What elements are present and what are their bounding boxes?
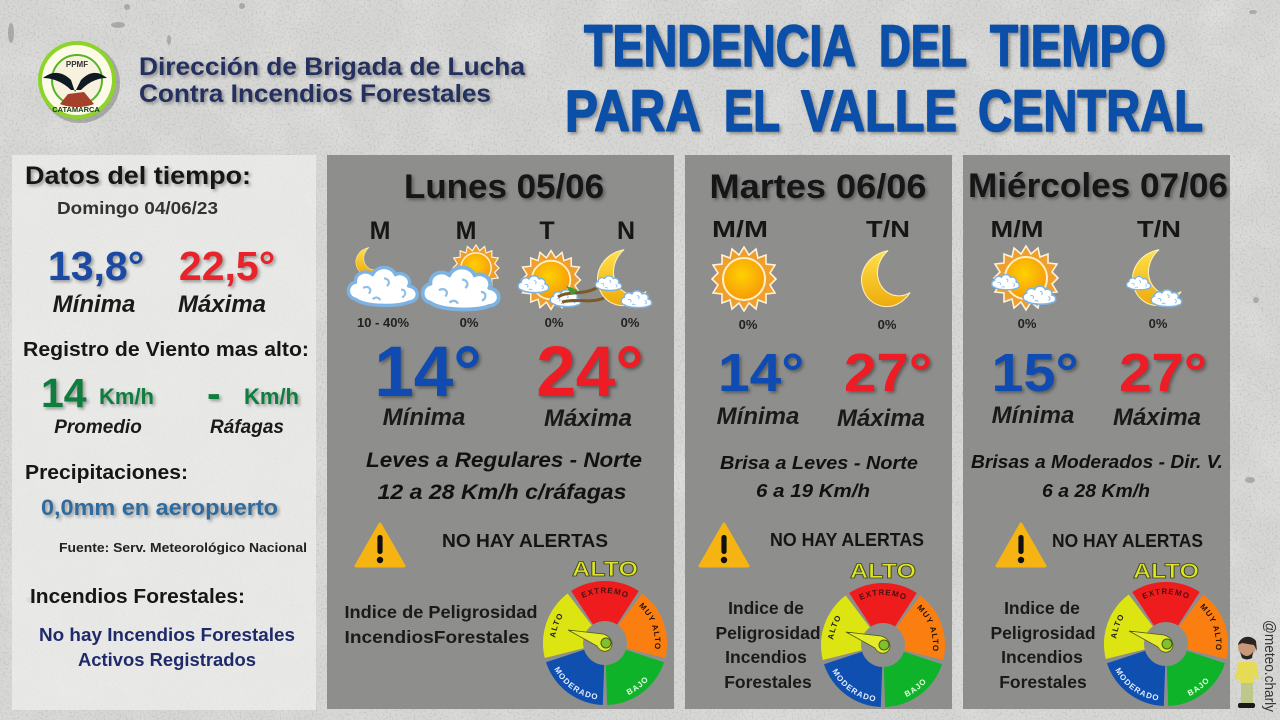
icon: sun with cloud (423, 245, 499, 309)
period labels: M/M (990, 216, 1044, 242)
alert: NO HAY ALERTAS (1052, 531, 1203, 551)
fire danger label (715, 598, 821, 692)
icon: sun with clouds (992, 246, 1058, 310)
period labels: M (456, 217, 476, 245)
fire danger label: Peligrosidad (715, 623, 821, 643)
maximum label: Máxima (178, 291, 266, 318)
maximum temperature: 27° (1119, 343, 1207, 403)
fire danger label: Incendios (725, 647, 807, 667)
main title: VALLE (801, 79, 957, 144)
rain probabilities: 10 - 40% (357, 315, 409, 330)
temperature labels: Mínima (383, 404, 465, 431)
header logo: PPMF (66, 60, 88, 69)
period labels (990, 216, 1181, 242)
heading: datos del tiempo: Datos del tiempo: (25, 162, 251, 190)
temperature labels: Mínima (992, 402, 1074, 429)
minimum value: 13,8° (48, 243, 144, 289)
maximum temperature: 24° (536, 333, 644, 412)
temperature labels (717, 403, 925, 432)
alert (700, 524, 924, 566)
author handle: @meteo.charly (1261, 620, 1277, 713)
temperature labels: Mínima (717, 403, 799, 430)
rain probabilities: 0% (460, 315, 479, 330)
alert: NO HAY ALERTAS (442, 531, 608, 551)
period labels: T (539, 217, 555, 245)
icon: sun (712, 247, 776, 311)
day heading: Miércoles 07/06 (968, 167, 1228, 205)
wind labels: Promedio (54, 417, 142, 438)
rain probabilities: 0% (1149, 316, 1168, 331)
temperature labels (992, 402, 1201, 431)
temperature labels: Máxima (1113, 404, 1201, 431)
header logo: CATAMARCA (52, 105, 100, 114)
gauge: fire danger: ALTO (850, 560, 916, 583)
precipitation heading: Precipitaciones: (25, 462, 188, 484)
icon: moon (861, 251, 910, 307)
gauge: fire danger: ALTO (572, 558, 638, 581)
main title: TENDENCIA (584, 14, 856, 79)
icon: moon with cloud (348, 247, 417, 305)
header logo (38, 41, 120, 123)
wind gusts: Km/h (244, 384, 299, 409)
temperature labels: Máxima (837, 405, 925, 432)
header organisation name: Dirección de Brigada de Lucha (139, 53, 526, 81)
main title: EL (724, 79, 780, 144)
author avatar (1235, 637, 1259, 708)
wind forecast (971, 452, 1223, 501)
fire danger label (344, 602, 538, 647)
wind forecast (366, 449, 642, 504)
header organisation name (139, 53, 526, 108)
minimum temperature: 15° (992, 343, 1078, 403)
rain probabilities: 0% (878, 317, 897, 332)
wind heading: Registro de Viento mas alto: (23, 339, 309, 361)
fire danger label: IncendiosForestales (344, 627, 530, 647)
header organisation name: Contra Incendios Forestales (139, 80, 491, 108)
icon: moon with clouds (1127, 250, 1182, 307)
panel: current weather data (12, 155, 316, 710)
wind forecast: Brisa a Leves - Norte (720, 453, 918, 473)
main title (565, 14, 1203, 144)
rain probabilities (1018, 316, 1168, 331)
rain probabilities (357, 315, 640, 330)
temperature labels: Máxima (544, 405, 632, 432)
maximum value: 22,5° (179, 243, 275, 289)
main title: PARA (565, 79, 701, 144)
alert (356, 524, 608, 566)
main title: DEL (879, 14, 967, 79)
gauge: fire danger: ALTO (1133, 560, 1199, 583)
minimum label: Mínima (53, 291, 135, 318)
wind gusts: - (207, 370, 221, 416)
precipitation value: 0,0mm en aeropuerto (41, 495, 278, 520)
panel: Lunes 05/06 (327, 155, 674, 709)
fires status: No hay Incendios Forestales (39, 624, 295, 645)
alert: NO HAY ALERTAS (770, 530, 924, 550)
wind average: 14 (41, 370, 87, 416)
fire danger label: Indice de (728, 598, 804, 618)
rain probabilities (739, 317, 897, 332)
fire danger label: Peligrosidad (990, 623, 1096, 643)
icon: moon clouds (596, 250, 652, 308)
wind forecast: 6 a 28 Km/h (1042, 481, 1150, 501)
period labels: N (617, 217, 635, 245)
period labels: T/N (1137, 216, 1181, 242)
rain probabilities: 0% (545, 315, 564, 330)
wind forecast: Brisas a Moderados - Dir. V. (971, 452, 1223, 472)
wind forecast (720, 453, 918, 501)
maximum temperature: 27° (844, 343, 932, 403)
period labels: M (370, 217, 390, 245)
source: Fuente: Serv. Meteorológico Nacional (59, 541, 307, 555)
panel: Miércoles 07/06 (963, 155, 1230, 709)
fires heading: Incendios Forestales: (30, 586, 245, 608)
period labels (370, 217, 635, 245)
fires status (39, 624, 295, 670)
fire danger label: Incendios (1001, 647, 1083, 667)
fire danger label (990, 598, 1096, 692)
rain probabilities: 0% (739, 317, 758, 332)
period labels (712, 216, 910, 242)
wind forecast: 12 a 28 Km/h c/ráfagas (378, 481, 626, 504)
date: Domingo 04/06/23 (57, 198, 218, 218)
wind gusts (207, 370, 299, 416)
main title: TIEMPO (990, 14, 1166, 79)
fire danger label: Forestales (999, 672, 1087, 692)
wind labels: Ráfagas (210, 417, 284, 438)
gauge: fire danger (543, 558, 667, 705)
wind average: Km/h (99, 384, 154, 409)
minimum temperature: 14° (374, 333, 482, 412)
period labels: M/M (712, 216, 768, 242)
fire danger label: Forestales (724, 672, 812, 692)
icon: sun clouds wind (518, 251, 604, 309)
wind forecast: Leves a Regulares - Norte (366, 449, 642, 472)
main title: CENTRAL (978, 79, 1203, 144)
temperature labels (383, 404, 632, 432)
day heading: Lunes 05/06 (404, 168, 604, 206)
wind forecast: 6 a 19 Km/h (756, 481, 870, 501)
day heading: Martes 06/06 (710, 168, 926, 206)
fires status: Activos Registrados (78, 649, 256, 670)
minimum temperature: 14° (718, 343, 804, 403)
rain probabilities: 0% (621, 315, 640, 330)
alert (997, 524, 1203, 566)
wind average (41, 370, 154, 416)
gauge: fire danger (1104, 560, 1228, 706)
gauge: fire danger (821, 560, 945, 707)
period labels: T/N (866, 216, 910, 242)
panel: Martes 06/06 (685, 155, 952, 709)
wind labels (54, 417, 284, 438)
fire danger label: Indice de (1004, 598, 1080, 618)
fire danger label: Indice de Peligrosidad (344, 602, 538, 622)
rain probabilities: 0% (1018, 316, 1037, 331)
